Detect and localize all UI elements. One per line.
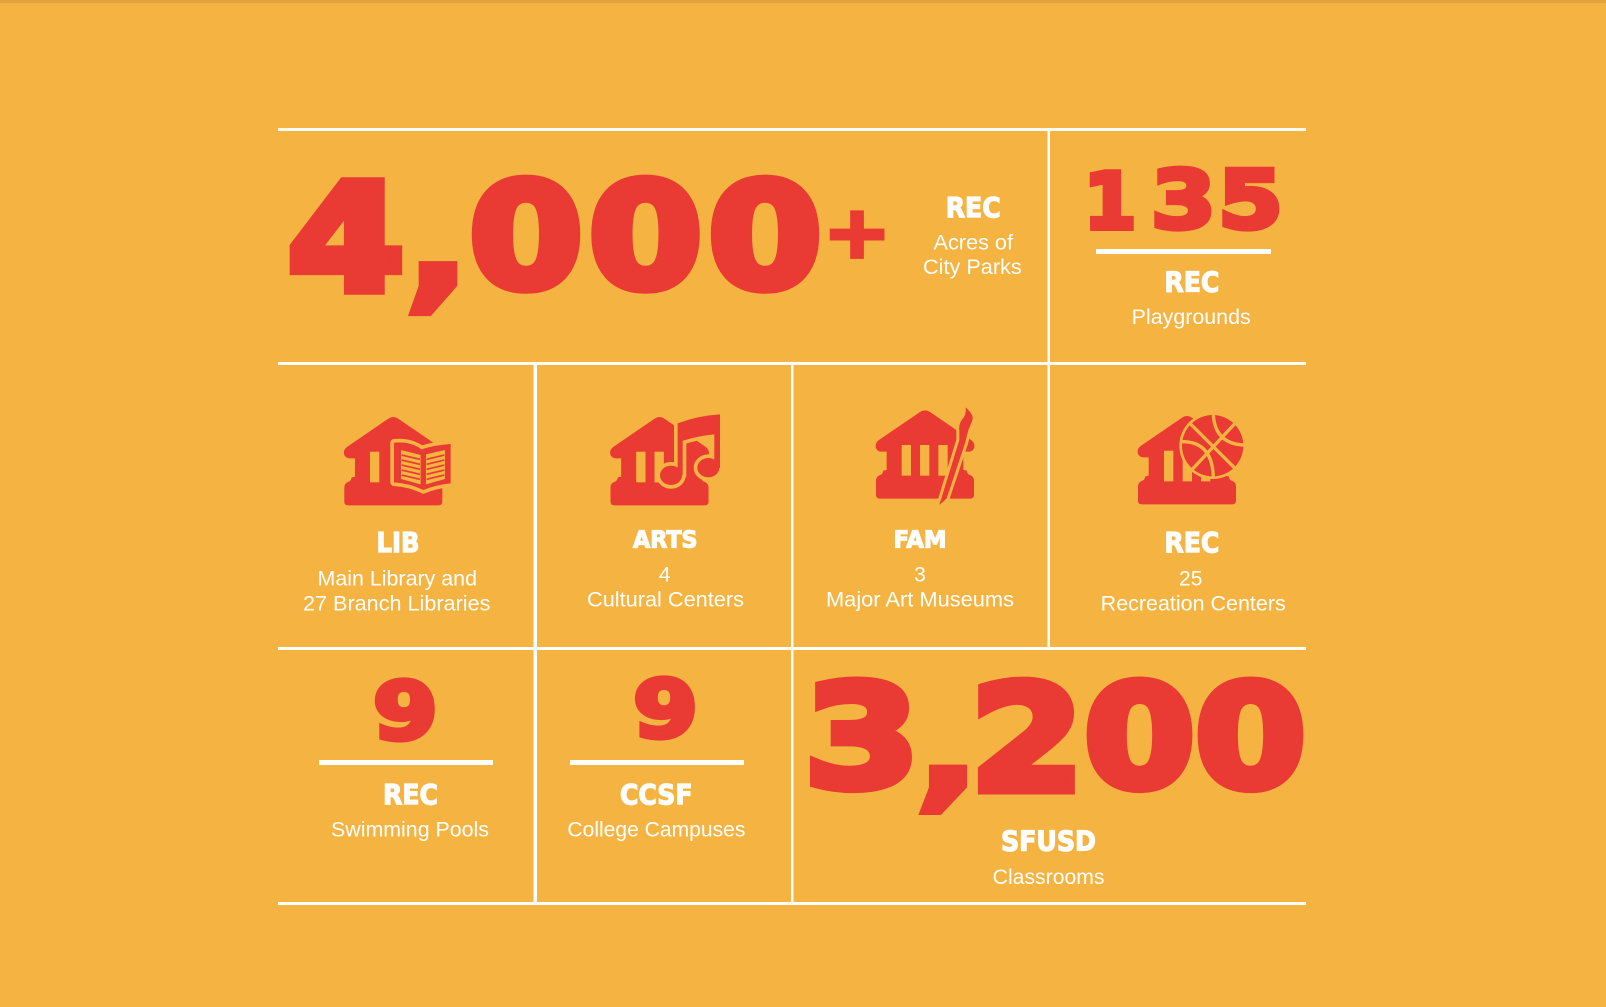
- icon: building with paintbrush: [876, 407, 974, 505]
- big number: 135: 3: [1151, 154, 1216, 247]
- description: Main Library and 27 Branch Libraries: [303, 568, 490, 616]
- description: Acres of City Parks: City Parks: [923, 256, 1022, 279]
- icon: building with open book: [344, 417, 451, 505]
- panel: 9 college campuses: [567, 665, 745, 842]
- big number: 3,200: 0: [1084, 655, 1195, 820]
- agency label: SFUSD: SFUSD: [1001, 826, 1096, 858]
- icon: building with basketball: [1138, 412, 1246, 504]
- description: 25 Recreation Centers: [1101, 568, 1286, 616]
- description: Swimming Pools: Swimming Pools: [331, 819, 489, 842]
- big number: 3,200: [804, 653, 1306, 830]
- panel: libraries: [303, 417, 490, 616]
- big number: 3,200: ,: [907, 653, 989, 830]
- big number: 135: [1084, 154, 1283, 248]
- panel: recreation centers: [1101, 412, 1286, 616]
- description: College Campuses: College Campuses: [567, 819, 745, 842]
- big number: 4,000+: 0: [708, 154, 822, 322]
- panel: 4,000+ acres of city parks: [288, 138, 1022, 332]
- description: Main Library and 27 Branch Libraries: Main Library and: [318, 568, 477, 591]
- agency label: FAM: FAM: [894, 526, 946, 554]
- icon: building with music note: [610, 414, 720, 505]
- agency label: REC: REC: [383, 779, 438, 811]
- description: Playgrounds: Playgrounds: [1132, 306, 1251, 329]
- description: 4 Cultural Centers: 4: [659, 564, 671, 587]
- big number: 9: 9: [633, 665, 698, 756]
- big number: 135: 5: [1218, 154, 1283, 247]
- description: 3 Major Art Museums: [826, 564, 1014, 612]
- panel: 3,200 classrooms: [804, 653, 1306, 889]
- agency label: ARTS: ARTS: [633, 526, 698, 554]
- big number: 4,000+: 4: [288, 154, 404, 326]
- description: 25 Recreation Centers: 25: [1179, 568, 1202, 591]
- description: 25 Recreation Centers: Recreation Centers: [1101, 593, 1286, 616]
- panel: 9 swimming pools: [319, 667, 493, 842]
- description: Acres of City Parks: Acres of: [934, 231, 1013, 254]
- description: Main Library and 27 Branch Libraries: 27 Branch Libraries: [303, 593, 490, 616]
- panel: cultural centers: [587, 414, 744, 612]
- description: 4 Cultural Centers: [587, 564, 744, 612]
- big number: 3,200: 2: [970, 655, 1084, 825]
- description: Classrooms: Classrooms: [993, 866, 1104, 889]
- big number: 3,200: 3: [804, 656, 920, 821]
- description: Acres of City Parks: [923, 231, 1022, 279]
- agency label: REC: REC: [1164, 266, 1219, 298]
- big number: 135: 1: [1084, 158, 1136, 248]
- description: 3 Major Art Museums: 3: [914, 564, 926, 587]
- big number: 4,000+: ,: [396, 138, 480, 332]
- agency label: CCSF: CCSF: [620, 779, 692, 811]
- agency label: LIB: LIB: [376, 527, 420, 559]
- description: 4 Cultural Centers: Cultural Centers: [587, 589, 744, 612]
- big number: 3,200: 0: [1195, 655, 1306, 820]
- panel: art museums: [826, 407, 1014, 612]
- big number: 4,000+: 0: [469, 154, 583, 322]
- agency label: REC: REC: [1164, 527, 1219, 559]
- big number: 4,000+: [288, 138, 888, 332]
- big number: 4,000+: +: [826, 182, 888, 285]
- description: 3 Major Art Museums: Major Art Museums: [826, 589, 1014, 612]
- big number: 9: 9: [373, 667, 438, 758]
- agency label: REC: REC: [946, 192, 1001, 224]
- big number: 4,000+: 0: [589, 154, 702, 322]
- panel: 135 playgrounds: [1084, 154, 1283, 329]
